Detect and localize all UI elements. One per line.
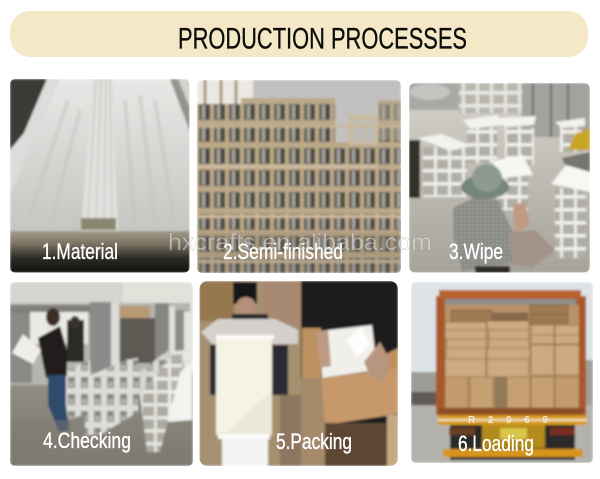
label: 5.Packing: 5.Packing bbox=[276, 429, 352, 454]
label: 4.Checking: 4.Checking bbox=[43, 428, 131, 453]
title: PRODUCTION PROCESSES bbox=[178, 22, 467, 56]
panel: 5 packing photo bbox=[199, 281, 398, 466]
watermark: hxcrafts.en.alibaba.com bbox=[168, 229, 432, 255]
cartons bbox=[451, 305, 568, 325]
label: 6.Loading: 6.Loading bbox=[458, 431, 534, 456]
panel: 2 semi-finished photo bbox=[197, 80, 401, 273]
panel: 6 loading photo bbox=[411, 282, 593, 463]
panel: 1 material photo bbox=[10, 79, 190, 273]
label: 3.Wipe: 3.Wipe bbox=[449, 239, 503, 264]
label: 1.Material: 1.Material bbox=[42, 239, 118, 264]
panel: 3 wipe photo bbox=[409, 83, 590, 273]
panel: 4 checking photo bbox=[10, 282, 193, 466]
title banner bbox=[10, 11, 588, 57]
label: 2.Semi-finished: 2.Semi-finished bbox=[223, 239, 343, 264]
truck number: R 2 0 6 9 bbox=[468, 415, 548, 426]
